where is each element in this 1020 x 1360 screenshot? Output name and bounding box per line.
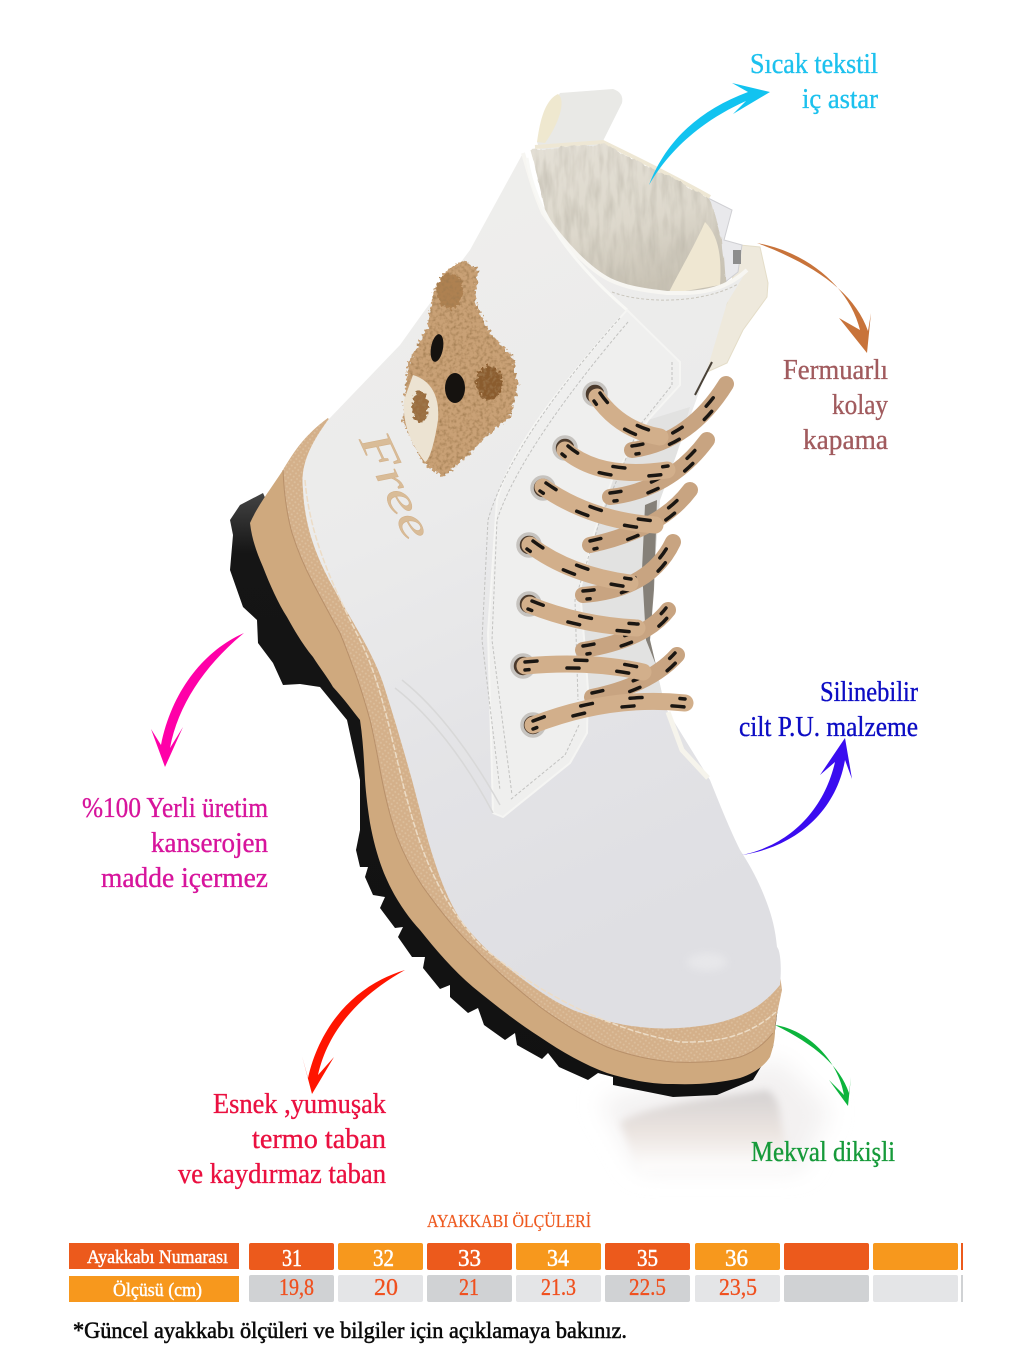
shoe number cells (249, 1243, 963, 1272)
shoe number cells: 35 (637, 1246, 658, 1272)
bear eye (445, 373, 465, 403)
tongue tip (668, 712, 708, 778)
textured welt (283, 418, 782, 1062)
laces (525, 382, 728, 729)
callout: production (82, 793, 268, 894)
shoe number cells: 33 (458, 1246, 481, 1272)
callout: material: cilt P.U. malzeme (739, 712, 918, 743)
bear patch (403, 260, 518, 477)
shoe number cells: 31 (282, 1246, 302, 1272)
sidewall ridge (283, 470, 773, 1062)
callout: sole: Esnek ,yumuşak (213, 1089, 386, 1120)
callout: zipper: kapama (803, 425, 889, 456)
size table (69, 1243, 963, 1302)
collar edge (523, 153, 747, 293)
collar seam strip (527, 158, 627, 310)
pull tab (537, 89, 622, 150)
back lace strands (583, 384, 726, 697)
callout: sole (178, 1089, 386, 1190)
fleece rim (535, 142, 710, 197)
bear nose patch (412, 391, 428, 423)
callout: stitching: Mekval dikişli (751, 1137, 895, 1168)
eyelet panel (488, 310, 680, 817)
quarter seam (395, 680, 500, 813)
length cells (249, 1275, 963, 1302)
collar stitching (612, 284, 738, 300)
callout: material (739, 677, 919, 743)
panel stitching (482, 318, 672, 800)
callout: zipper (783, 355, 889, 456)
arrow: green to stitching (775, 1025, 851, 1106)
arrow: pink to heel (151, 633, 244, 767)
zipper (700, 198, 742, 290)
callout: production: madde içermez (101, 863, 268, 894)
fleece lining (531, 142, 725, 298)
zipper flap with fleece (690, 245, 768, 400)
callout: production: kanserojen (151, 828, 268, 859)
toe highlight (687, 953, 727, 971)
shoe number cells: 32 (373, 1246, 394, 1272)
welt stitching (305, 480, 776, 1042)
back lace marks (583, 382, 728, 701)
length cells: 19,8 (279, 1275, 314, 1301)
callout: sole: ve kaydırmaz taban (178, 1159, 386, 1190)
arrow: blue to material (742, 738, 852, 855)
bear muzzle (404, 375, 438, 462)
callout: production: %100 Yerli üretim (82, 793, 268, 824)
cream tongue lining (668, 222, 720, 294)
white upper (302, 153, 781, 1028)
bear ear spot (476, 366, 502, 400)
length cells: 21 (459, 1275, 479, 1301)
shoe number cells: 34 (547, 1246, 569, 1272)
length cells: 23,5 (719, 1275, 757, 1301)
length cells: 21.3 (541, 1275, 576, 1301)
metal eyelets (512, 383, 606, 736)
panel: boot photo (230, 89, 830, 1170)
arrow: brown to zipper (757, 243, 871, 353)
length cells: 20 (374, 1275, 398, 1301)
black outsole with lugs (230, 493, 780, 1097)
row label: length: Ölçüsü (cm) (113, 1280, 202, 1301)
tongue gap behind laces (580, 407, 690, 707)
front lace strands (525, 397, 685, 725)
callout: zipper: Fermuarlı (783, 355, 888, 386)
arrow: cyan to lining (649, 83, 770, 185)
footnote: *Güncel ayakkabı ölçüleri ve bilgiler için açıklamaya bakınız. (73, 1318, 627, 1343)
callout: lining (750, 49, 879, 115)
arrow: red to sole (302, 970, 405, 1094)
callout: lining: Sıcak tekstil (750, 49, 878, 80)
callout: zipper: kolay (832, 390, 888, 421)
callout: lining: iç astar (802, 84, 879, 115)
ground reflection (600, 1060, 830, 1170)
zipper pull (733, 250, 741, 264)
tan midsole sidewall (250, 418, 780, 1084)
row label: shoe number: Ayakkabı Numarası (87, 1247, 228, 1268)
size table title: AYAKKABI ÖLÇÜLERİ (427, 1211, 591, 1231)
flap shadow line (695, 362, 712, 395)
length cells: 22.5 (629, 1275, 666, 1301)
bear eye (429, 333, 445, 363)
shoe number cells: 36 (725, 1246, 748, 1272)
row label: length (69, 1276, 239, 1302)
front lace marks (525, 393, 685, 729)
callout: material: Silinebilir (820, 677, 919, 708)
bear ear inner (437, 273, 463, 309)
embroidered Free: Free (349, 422, 443, 548)
callout: sole: termo taban (252, 1124, 386, 1155)
